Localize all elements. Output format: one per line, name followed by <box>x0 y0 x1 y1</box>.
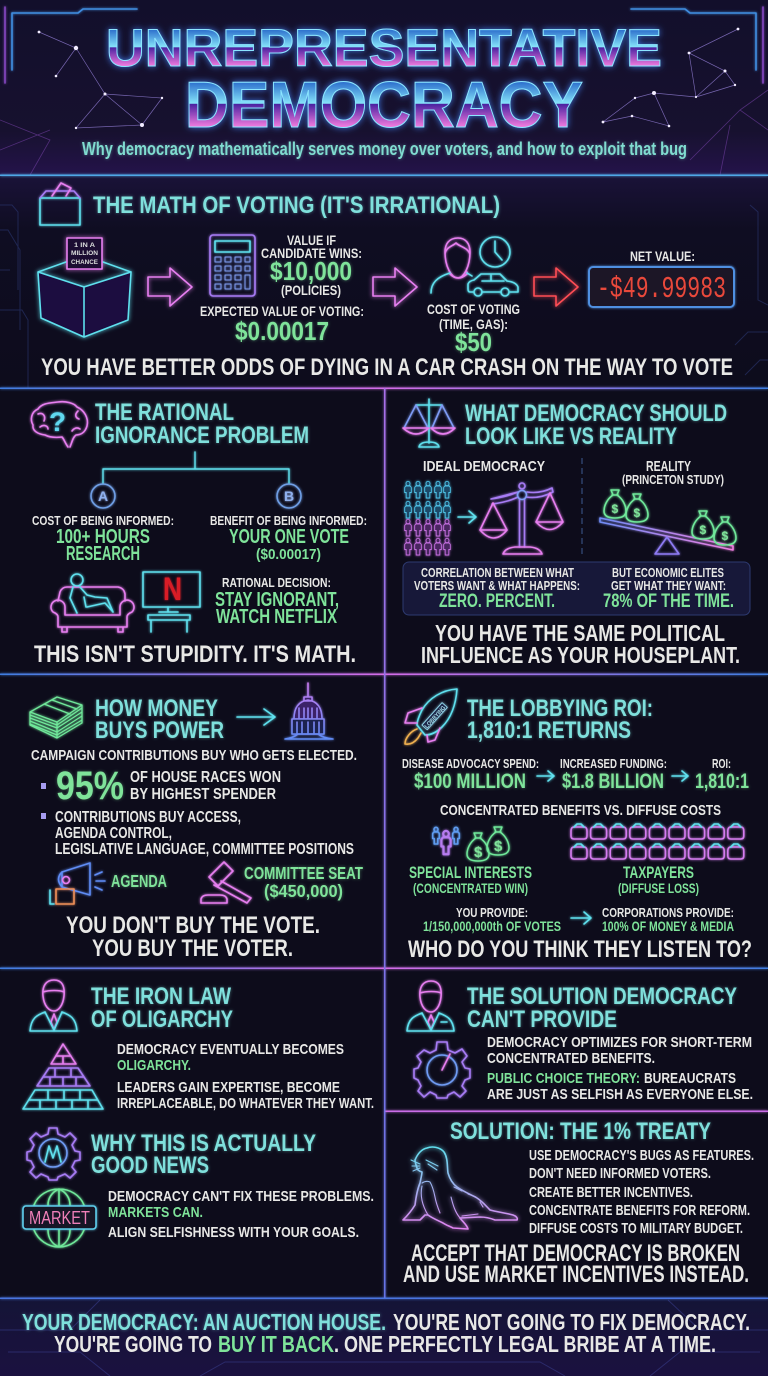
rational decision: STAY IGNORANT, <box>215 589 339 611</box>
heading: iron law <box>91 983 233 1033</box>
panel: democracy vs reality <box>403 399 750 668</box>
text: cost of voting: (TIME, GAS): <box>439 316 508 332</box>
arrow <box>458 511 476 523</box>
text: oligarchy body <box>117 1041 374 1112</box>
label: ideal democracy: IDEAL DEMOCRACY <box>423 458 545 475</box>
heading: solution democracy can't provide <box>467 983 737 1033</box>
icon: market globe <box>23 1189 96 1247</box>
panel: lobbying ROI <box>402 689 752 963</box>
option B: benefit: YOUR ONE VOTE <box>229 526 349 548</box>
text: treaty bullets: CREATE BETTER INCENTIVES. <box>529 1184 693 1201</box>
callout: correlation box: VOTERS WANT & WHAT HAPPENS: <box>414 578 580 593</box>
option A: cost: COST OF BEING INFORMED: <box>32 513 174 528</box>
option B: benefit: BENEFIT OF BEING INFORMED: <box>210 513 367 528</box>
label: committee seat: ($450,000) <box>264 881 343 901</box>
text: democracy optimizes: PUBLIC CHOICE THEORY: <box>487 1070 640 1087</box>
text: expected value: $0.00017 <box>235 316 329 346</box>
heading: rational ignorance <box>95 399 309 449</box>
title: UNREPRESENTATIVE <box>106 19 662 78</box>
option A: cost: 100+ HOURS <box>56 526 150 548</box>
icon: calculator <box>210 235 255 296</box>
callout: correlation box: CORRELATION BETWEEN WHAT <box>421 565 574 580</box>
text: you provide: 1/150,000,000th OF VOTES <box>423 919 561 934</box>
icon: scales <box>403 399 455 447</box>
footer background <box>0 1298 768 1376</box>
heading: rational ignorance: THE RATIONAL <box>95 399 234 426</box>
bullet: contributions buy access: CONTRIBUTIONS BUY ACCESS, <box>55 809 241 826</box>
text: corporations provide <box>602 905 734 934</box>
stat: 95 percent <box>41 764 281 808</box>
heading: how money buys power: BUYS POWER <box>95 717 224 744</box>
net value label: NET VALUE: <box>630 248 695 264</box>
icon: tilted seesaw with money bags: $ <box>700 523 706 537</box>
text: cost of voting: $50 <box>455 327 492 357</box>
footer: BUY IT BACK <box>218 1331 334 1357</box>
heading: lobbying ROI <box>467 695 653 744</box>
constellations <box>38 28 739 129</box>
text: good news body: MARKETS CAN. <box>108 1204 203 1221</box>
option B: benefit <box>210 513 367 563</box>
heading: how money buys power <box>95 695 224 744</box>
takeaway: accept democracy is broken <box>403 1240 749 1288</box>
icon: ballot box with paper: MILLION <box>71 250 98 257</box>
icon: tv with netflix logo <box>143 571 200 632</box>
divider dashed <box>581 458 583 555</box>
text: good news body: DEMOCRACY CAN'T FIX THESE PROBLEMS. <box>108 1188 374 1205</box>
rational decision: WATCH NETFLIX <box>216 606 337 628</box>
option B: benefit: ($0.00017) <box>256 546 321 563</box>
heading: math of voting: THE MATH OF VOTING (IT'S IRRATIONAL) <box>93 192 500 219</box>
heading: iron law: THE IRON LAW <box>91 983 231 1010</box>
arrow <box>373 268 417 306</box>
header background <box>0 0 768 175</box>
arrow <box>571 912 591 924</box>
icon: pyramid <box>23 1044 103 1109</box>
text: expected value: EXPECTED VALUE OF VOTING: <box>200 303 364 319</box>
heading: solution democracy can't provide: CAN'T PROVIDE <box>467 1006 617 1033</box>
bullet: contributions buy access: LEGISLATIVE LANGUAGE, COMMITTEE POSITIONS <box>55 841 354 858</box>
arrow <box>237 709 275 725</box>
text: campaign contributions: CAMPAIGN CONTRIBUTIONS BUY WHO GETS ELECTED. <box>31 748 357 764</box>
option A: cost: RESEARCH <box>66 543 140 565</box>
icon: money stack <box>30 697 82 738</box>
icon: rocket <box>405 689 457 744</box>
text: oligarchy body: LEADERS GAIN EXPERTISE, BECOME <box>117 1079 340 1096</box>
label: taxpayers: (DIFFUSE LOSS) <box>618 880 699 896</box>
bullet: contributions buy access <box>41 809 354 858</box>
stat row: spend to ROI: DISEASE ADVOCACY SPEND: <box>402 756 539 771</box>
takeaway: houseplant <box>421 620 740 668</box>
arrow: red <box>534 268 578 306</box>
text: cost of voting: COST OF VOTING <box>427 301 520 317</box>
label: taxpayers <box>618 863 699 896</box>
text: value if candidate wins: $10,000 <box>270 256 352 286</box>
icon: tv with netflix logo: N <box>163 571 182 607</box>
icon: tilted seesaw with money bags: $ <box>722 529 728 543</box>
title: DEMOCRACY <box>185 68 583 141</box>
footer: YOUR DEMOCRACY: AN AUCTION HOUSE. <box>22 1309 386 1335</box>
panel: solution democracy can't provide <box>407 981 753 1103</box>
decision tree: B <box>284 488 294 504</box>
label: reality: (PRINCETON STUDY) <box>622 473 724 487</box>
title <box>106 19 662 141</box>
label: taxpayers: TAXPAYERS <box>623 863 694 882</box>
text: value if candidate wins: VALUE IF <box>287 232 336 248</box>
footer <box>22 1309 750 1357</box>
arrow <box>148 268 192 306</box>
heading: good news: WHY THIS IS ACTUALLY <box>91 1130 316 1157</box>
heading: what democracy should look like: LOOK LIKE VS REALITY <box>465 423 677 450</box>
text: good news body: ALIGN SELFISHNESS WITH YOUR GOALS. <box>108 1224 359 1241</box>
label: special interests: (CONCENTRATED WIN) <box>413 880 528 896</box>
icon: market globe: MARKET <box>29 1208 90 1228</box>
icon: capitol <box>285 683 333 739</box>
icon: special interests with money bags: $ <box>494 838 503 855</box>
panel: solution the 1% treaty <box>403 1118 754 1288</box>
text: democracy optimizes: BUREAUCRATS <box>644 1070 736 1087</box>
text: oligarchy body: DEMOCRACY EVENTUALLY BECOMES <box>117 1041 344 1058</box>
stat row: spend to ROI: 1,810:1 <box>695 769 749 793</box>
decision tree <box>91 452 301 508</box>
text: oligarchy body: OLIGARCHY. <box>117 1057 191 1074</box>
icon: person, clock and car <box>431 237 518 296</box>
icon: gavel <box>201 862 251 903</box>
icon: special interests with money bags <box>433 827 509 861</box>
label: special interests <box>409 863 532 896</box>
icon: people grid <box>405 481 450 555</box>
heading: iron law: OF OLIGARCHY <box>91 1006 233 1033</box>
heading: what democracy should look like <box>465 400 727 450</box>
panel: rational ignorance <box>31 399 367 668</box>
stat: 95 percent: 95% <box>56 764 124 808</box>
stat row: spend to ROI: $100 MILLION <box>414 769 526 793</box>
text: good news body <box>108 1188 374 1241</box>
heading: lobbying ROI: THE LOBBYING ROI: <box>467 695 653 722</box>
stat row: spend to ROI: INCREASED FUNDING: <box>560 756 667 771</box>
panel: how money buys power <box>30 683 363 962</box>
panel: the math of voting <box>38 183 734 381</box>
icon: tilted seesaw with money bags: $ <box>634 506 640 520</box>
icon: tilted seesaw with money bags <box>600 490 736 554</box>
icon: balanced scale <box>480 483 563 554</box>
icon: suited man <box>407 981 454 1031</box>
decision tree: A <box>98 488 108 504</box>
stat row: spend to ROI: $1.8 BILLION <box>562 769 664 793</box>
text: democracy optimizes: CONCENTRATED BENEFITS. <box>487 1050 655 1067</box>
net value display <box>589 267 734 307</box>
text: oligarchy body: IRREPLACEABLE, DO WHATEVER THEY WANT. <box>117 1095 374 1112</box>
icon: couch with person <box>51 574 134 632</box>
stat: 95 percent: OF HOUSE RACES WON <box>130 769 281 786</box>
takeaway: stupidity: THIS ISN'T STUPIDITY. IT'S MATH. <box>34 641 356 668</box>
icon: special interests with money bags: $ <box>474 844 483 861</box>
icon: ballot box with paper: CHANCE <box>71 259 99 266</box>
rational decision: RATIONAL DECISION: <box>222 575 331 590</box>
text: you provide <box>423 905 561 934</box>
text: expected value <box>200 303 364 346</box>
stat: 95 percent: BY HIGHEST SPENDER <box>130 786 276 803</box>
text: treaty bullets <box>529 1147 754 1237</box>
text: you provide: YOU PROVIDE: <box>456 905 528 920</box>
section one background <box>0 176 768 388</box>
icon: brain with question mark: ? <box>49 407 66 437</box>
label: reality: REALITY <box>646 458 691 475</box>
heading: good news: GOOD NEWS <box>91 1152 209 1179</box>
icon: ballot box with paper <box>38 238 131 337</box>
icon: suited man <box>30 980 77 1031</box>
icon: megaphone <box>50 863 105 904</box>
text: value if candidate wins: CANDIDATE WINS: <box>261 245 362 261</box>
heading: good news <box>91 1130 316 1179</box>
text: cost of voting <box>427 301 520 357</box>
icon: rocket: LOBBYING <box>424 705 448 730</box>
heading: how money buys power: HOW MONEY <box>95 695 218 722</box>
header corner frame <box>5 7 763 83</box>
text: treaty bullets: DON'T NEED INFORMED VOTERS. <box>529 1165 711 1182</box>
stat row: spend to ROI: ROI: <box>712 756 731 771</box>
text: value if candidate wins <box>261 232 362 298</box>
text: democracy optimizes <box>487 1034 753 1103</box>
icon: gear with M <box>27 1128 80 1180</box>
icon: taxpayer purses <box>571 824 744 859</box>
heading: lobbying ROI: 1,810:1 RETURNS <box>467 717 631 744</box>
label: special interests: SPECIAL INTERESTS <box>409 863 532 882</box>
label: committee seat: COMMITTEE SEAT <box>244 863 363 883</box>
takeaway: buy the voter: YOU BUY THE VOTER. <box>92 935 293 962</box>
callout: correlation box <box>403 562 750 615</box>
icon: small ballot box <box>40 183 80 225</box>
callout: correlation box: 78% OF THE TIME. <box>603 591 734 612</box>
label: reality <box>622 458 724 487</box>
takeaway: buy the voter: YOU DON'T BUY THE VOTE. <box>66 912 320 939</box>
text: corporations provide: 100% OF MONEY & MEDIA <box>602 919 734 934</box>
rational decision <box>215 575 339 628</box>
heading: rational ignorance: IGNORANCE PROBLEM <box>95 422 309 449</box>
text: value if candidate wins: (POLICIES) <box>281 282 341 298</box>
footer: YOU'RE GOING TO <box>54 1331 212 1357</box>
icon: seal <box>403 1147 517 1229</box>
icon: tilted seesaw with money bags: $ <box>612 502 618 516</box>
panel: iron law of oligarchy <box>23 980 374 1247</box>
bullet: contributions buy access: AGENDA CONTROL, <box>55 825 172 842</box>
callout: correlation box: ZERO. PERCENT. <box>439 591 555 612</box>
icon: ballot box with paper: 1 IN A <box>74 243 96 249</box>
callout: correlation box: GET WHAT THEY WANT: <box>611 578 726 593</box>
callout: correlation box: BUT ECONOMIC ELITES <box>612 565 724 580</box>
label: committee seat <box>244 863 363 901</box>
label: agenda: AGENDA <box>111 871 167 891</box>
takeaway: buy the voter <box>66 912 320 962</box>
option A: cost <box>32 513 174 565</box>
stat row: spend to ROI <box>402 756 749 793</box>
icon: gear and clock <box>414 1042 470 1098</box>
icon: brain with question mark <box>31 402 87 447</box>
